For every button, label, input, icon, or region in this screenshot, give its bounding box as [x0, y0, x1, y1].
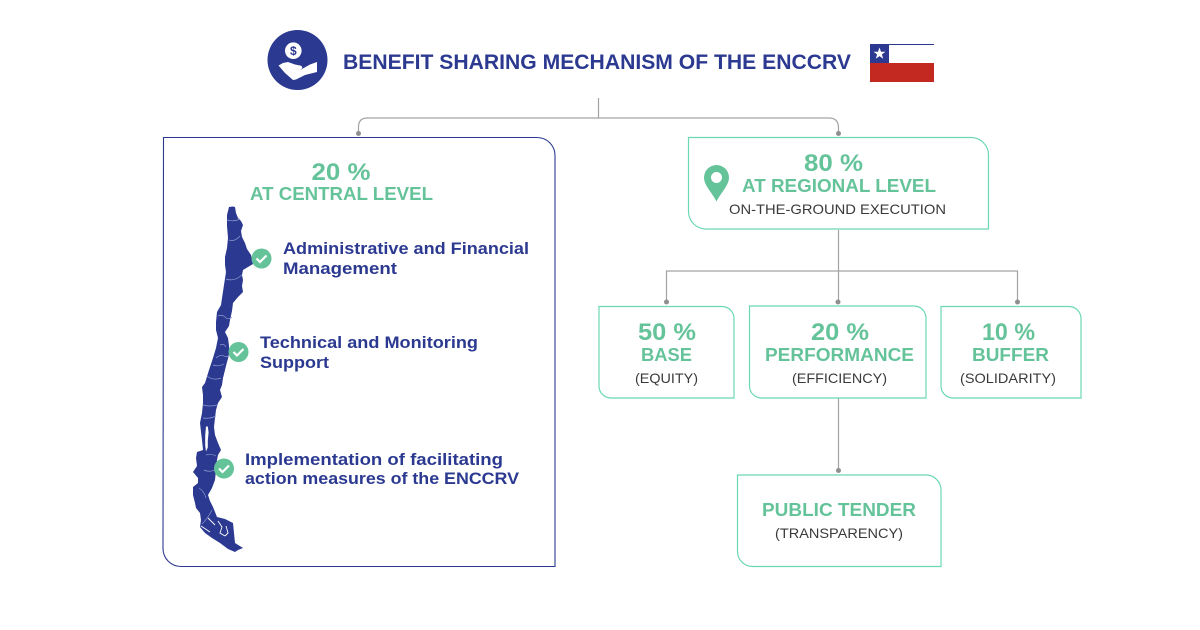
- check item 2: Technical and Monitoring: [260, 333, 478, 352]
- panel: performance 20 percent: PERFORMANCE: [765, 345, 914, 365]
- heading: 80 percent: 80 %: [804, 150, 863, 177]
- panel: buffer 10 percent: 10 %: [982, 319, 1035, 346]
- heading: at central level: AT CENTRAL LEVEL: [250, 184, 433, 204]
- panel: base 50 percent: (EQUITY): [635, 370, 698, 386]
- panel: base 50 percent: 50 %: [638, 319, 696, 346]
- panel: performance 20 percent: 20 %: [811, 319, 869, 346]
- panel: central level: [163, 138, 555, 566]
- connector: top split: [356, 98, 841, 136]
- panel: public tender: [738, 475, 941, 566]
- connector: regional split: [664, 230, 1020, 304]
- panel: performance 20 percent: (EFFICIENCY): [792, 370, 887, 386]
- icon: Chile flag: [870, 44, 934, 82]
- check item 1: Management: [283, 259, 397, 278]
- icon: hand holding coin: [268, 30, 328, 90]
- text: on-the-ground execution: ON-THE-GROUND EXECUTION: [729, 201, 946, 217]
- panel: buffer 10 percent: BUFFER: [972, 345, 1049, 365]
- panel: performance 20 percent: [750, 306, 926, 398]
- connector: performance to tender: [836, 398, 841, 473]
- check item 2: [228, 333, 478, 372]
- check item 2: Support: [260, 353, 329, 372]
- check item 1: [252, 239, 529, 278]
- panel: buffer 10 percent: [941, 306, 1081, 398]
- panel: buffer 10 percent: (SOLIDARITY): [960, 370, 1056, 386]
- panel: public tender: (TRANSPARENCY): [775, 525, 903, 541]
- icon: hand holding coin: $: [290, 44, 297, 58]
- title: BENEFIT SHARING MECHANISM OF THE ENCCRV: [343, 51, 851, 74]
- map of Chile: [193, 206, 253, 552]
- panel: public tender: PUBLIC TENDER: [762, 500, 916, 520]
- check item 3: [214, 450, 520, 488]
- check item 3: Implementation of facilitating: [245, 450, 503, 469]
- heading: 20 percent central: 20 %: [312, 159, 370, 186]
- panel: regional level: [688, 138, 988, 229]
- check item 3: action measures of the ENCCRV: [245, 469, 520, 488]
- panel: base 50 percent: BASE: [641, 345, 692, 365]
- check item 1: Administrative and Financial: [283, 239, 529, 258]
- heading: at regional level: AT REGIONAL LEVEL: [742, 176, 936, 196]
- icon: location pin: [704, 165, 729, 202]
- panel: base 50 percent: [599, 306, 734, 398]
